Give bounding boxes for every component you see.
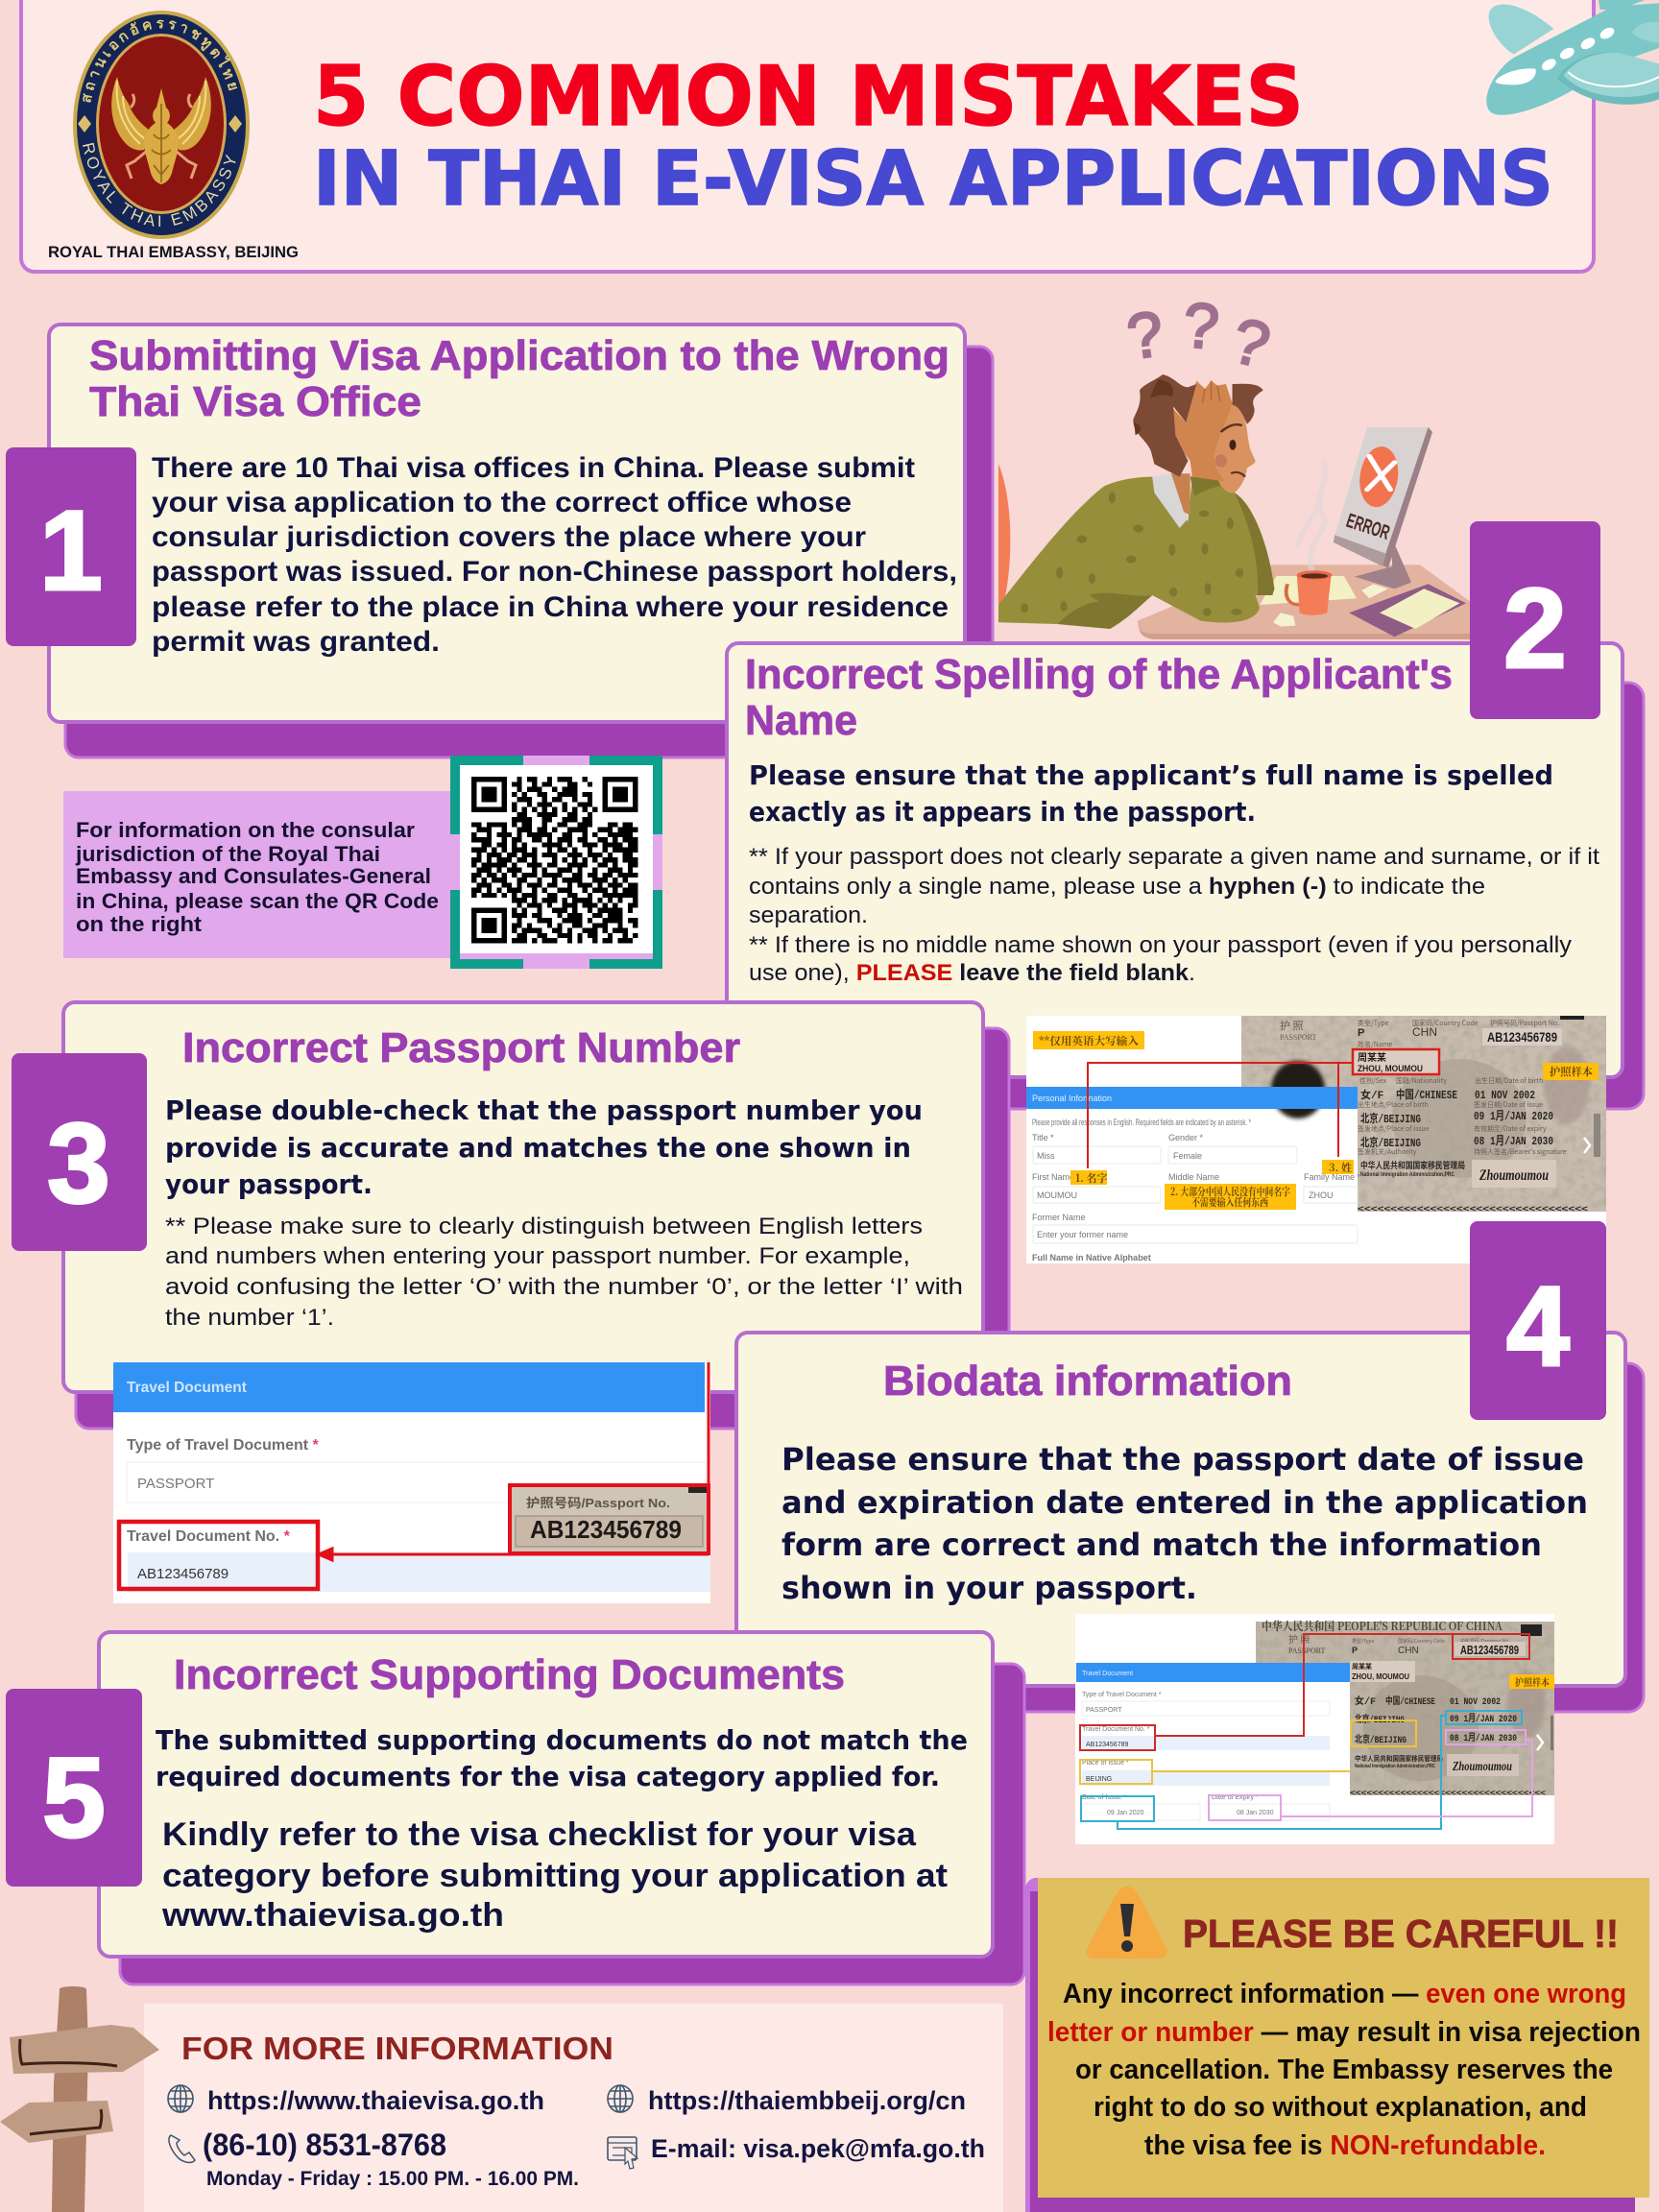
form text and fields: ZHOU	[1309, 1190, 1333, 1200]
passport text: 08 1月/JAN 2030	[1450, 1732, 1517, 1744]
heading 1: Submitting Visa Application to the Wrong	[89, 332, 950, 379]
form text and fields: Date of Issue *	[1082, 1794, 1126, 1801]
note text	[75, 818, 439, 936]
icon: garuda	[111, 77, 211, 184]
number badge 3: 3	[47, 1100, 110, 1227]
header banner	[19, 0, 1596, 274]
number badge 1	[6, 447, 136, 646]
body text 1: permit was granted.	[152, 626, 440, 658]
passport text: CHN	[1412, 1025, 1437, 1039]
heading 1: Thai Visa Office	[89, 378, 421, 425]
number badge 5	[6, 1689, 142, 1887]
passport text	[1280, 1018, 1600, 1214]
heading 2: Name	[745, 697, 857, 744]
checklist text: www.thaievisa.go.th	[161, 1897, 504, 1934]
passport text: 持照人签名/Bearer's signature	[1474, 1147, 1567, 1157]
icon: embassy seal: ROYAL THAI EMBASSY	[83, 142, 236, 227]
body text 2: exactly as it appears in the passport.	[749, 796, 1256, 828]
passport text: PASSPORT	[1288, 1647, 1325, 1655]
checklist text: category before submitting your application at	[162, 1858, 948, 1894]
passport text: PASSPORT	[1280, 1033, 1316, 1042]
illustration: confused person at computer with error: ERROR	[1343, 510, 1392, 544]
panel 2: incorrect spelling of name	[727, 643, 1644, 1109]
title	[313, 49, 1553, 223]
heading 2: Incorrect Spelling of the Applicant's	[745, 651, 1453, 698]
notes 2: use one), PLEASE leave the field blank .	[749, 960, 1195, 986]
caption: embassy name: ROYAL THAI EMBASSY, BEIJING	[48, 243, 299, 261]
warning body: right to do so without explanation, and	[1094, 2092, 1587, 2123]
passport text: National Immigration Administration,PRC	[1360, 1172, 1455, 1178]
form text and fields: Middle Name	[1168, 1172, 1219, 1182]
passport text: 护 照	[1280, 1018, 1303, 1033]
passport text: 国籍/Nationality	[1396, 1076, 1447, 1086]
yellow callouts: 3. 姓	[1329, 1160, 1352, 1175]
heading 3: Incorrect Passport Number	[182, 1024, 740, 1071]
phone number	[169, 2128, 579, 2190]
passport text	[1262, 1618, 1553, 1797]
passport text: 类型/Type	[1358, 1019, 1389, 1028]
passport text: AB123456789	[1487, 1029, 1557, 1045]
checklist text: Kindly refer to the visa checklist for your visa	[162, 1816, 917, 1853]
notes 3: and numbers when entering your passport number. For example,	[165, 1243, 910, 1269]
passport text: 09 1月/JAN 2020	[1450, 1713, 1517, 1725]
form text and fields: Please provide all responses in English. Required fields are indicated by an asterisk. *	[1032, 1118, 1251, 1127]
passport text: 国家码/Country Code	[1412, 1019, 1479, 1028]
passport number crop: AB123456789	[530, 1515, 682, 1544]
panel 3: incorrect passport number	[63, 1002, 1009, 1429]
heading 4: Biodata information	[883, 1358, 1292, 1405]
form text and fields: AB123456789	[1086, 1742, 1128, 1748]
body text 5: required documents for the visa category applied for.	[156, 1761, 940, 1792]
colored connector lines and boxes	[1080, 1634, 1532, 1829]
form text and fields: MOUMOU	[1037, 1190, 1077, 1200]
illustration: confused person at computer with error	[998, 289, 1470, 639]
form text and fields: 08 Jan 2030	[1237, 1810, 1274, 1816]
passport text: 护照号码/Passport No.	[1460, 1638, 1510, 1645]
notes 3: the number ‘1’.	[165, 1305, 334, 1331]
title: 5 COMMON MISTAKES	[313, 49, 1304, 145]
body text 5	[156, 1724, 968, 1792]
icon: wooden signpost	[0, 1986, 159, 2212]
panel: for more information	[144, 2004, 1003, 2212]
passport text: <<<<<<<<<<<<<<<<<<<<<<<<<<<<<<<<<<<	[1358, 1204, 1588, 1214]
icon: question marks	[1123, 289, 1277, 381]
passport text: P	[1352, 1646, 1358, 1655]
notes 2: ** If there is no middle name shown on your passport (even if you personally	[749, 932, 1572, 958]
title: IN THAI E-VISA APPLICATIONS	[313, 136, 1553, 223]
note text: on the right	[76, 912, 203, 936]
passport text: 北京/BEIJING	[1360, 1111, 1421, 1126]
passport text: 北京/BEIJING	[1355, 1733, 1407, 1746]
passport text: AB123456789	[1460, 1643, 1519, 1657]
checklist text	[161, 1816, 948, 1934]
passport text: 姓名/Name	[1358, 1040, 1392, 1049]
passport text: 北京/BEIJING	[1355, 1713, 1405, 1726]
passport text: 签发日期/Date of issue	[1474, 1100, 1543, 1110]
passport text: National Immigration Administration,PRC	[1355, 1764, 1435, 1769]
image: travel document form with passport number: PASSPORT	[137, 1476, 214, 1492]
phone number: Monday - Friday : 15.00 PM. - 16.00 PM.	[206, 2168, 579, 2190]
notes 2: separation.	[749, 902, 868, 928]
passport number crop	[510, 1483, 709, 1553]
yellow label: 护照样本	[1515, 1674, 1550, 1689]
passport text: Zhoumoumou	[1452, 1760, 1512, 1774]
note text: jurisdiction of the Royal Thai	[75, 842, 380, 866]
warning body: the visa fee is NON-refundable.	[1144, 2130, 1546, 2161]
notes 2: ** If your passport does not clearly separate a given name and surname, or if it	[749, 844, 1599, 870]
passport text: 类型/Type	[1352, 1638, 1374, 1645]
passport text: 性别/Sex	[1359, 1076, 1387, 1086]
passport text: 中华人民共和国国家移民管理局	[1355, 1754, 1443, 1763]
number badge 2: 2	[1503, 565, 1567, 692]
notes 3: avoid confusing the letter ‘O’ with the number ‘0’, or the letter ‘I’ with	[165, 1274, 963, 1300]
form text and fields	[1026, 1087, 1361, 1262]
passport text: 周某某	[1358, 1051, 1386, 1064]
form text and fields: First Name *	[1032, 1172, 1081, 1182]
passport text: 中华人民共和国国家移民管理局	[1360, 1160, 1465, 1170]
form text and fields: Former Name	[1032, 1213, 1086, 1222]
notes 3	[165, 1214, 963, 1331]
warning body: or cancellation. The Embassy reserves the	[1075, 2055, 1613, 2085]
passport text: 中华人民共和国 PEOPLE'S REPUBLIC OF CHINA	[1262, 1618, 1503, 1634]
QR code	[450, 756, 662, 969]
image: travel document form with passport number: AB123456789	[137, 1566, 228, 1582]
passport text: ZHOU, MOUMOU	[1358, 1064, 1423, 1074]
image: travel document form with passport number: Travel Document	[127, 1380, 247, 1396]
phone number: (86-10) 8531-8768	[203, 2128, 446, 2162]
passport text: 北京/BEIJING	[1360, 1135, 1421, 1150]
number badge 4	[1470, 1221, 1606, 1420]
passport text: 女/F	[1360, 1088, 1383, 1102]
form text and fields: Travel Document No. *	[1082, 1726, 1150, 1733]
passport text: Zhoumoumou	[1479, 1167, 1549, 1184]
body text 3	[165, 1094, 923, 1200]
passport text: 01 NOV 2002	[1450, 1697, 1501, 1708]
form text and fields: Date of Expiry *	[1212, 1794, 1259, 1801]
panel 5: incorrect supporting documents	[99, 1632, 1024, 1984]
passport text: 中国/CHINESE	[1385, 1695, 1435, 1708]
notes 2	[749, 844, 1599, 986]
passport text: 签发地点/Place of issue	[1358, 1124, 1430, 1134]
passport text: 08 1月/JAN 2030	[1474, 1134, 1553, 1148]
heading 5: Incorrect Supporting Documents	[174, 1651, 845, 1698]
body text 1: please refer to the place in China where your residence	[152, 591, 949, 623]
warning body: Any incorrect information — even one wrong	[1063, 1979, 1626, 2009]
body text 1	[152, 452, 957, 658]
yellow callouts: 1. 名字	[1075, 1170, 1108, 1186]
form text and fields: PASSPORT	[1086, 1707, 1122, 1714]
form text and fields: Personal Information	[1032, 1094, 1112, 1103]
body text 2: Please ensure that the applicant’s full name is spelled	[749, 759, 1553, 791]
note text: For information on the consular	[76, 818, 415, 842]
head: face, hand and hair	[1213, 400, 1256, 493]
notes 3: ** Please make sure to clearly distinguish between English letters	[165, 1214, 923, 1239]
image: travel document form with passport number: Travel Document No. *	[127, 1528, 291, 1545]
panel 1: wrong visa office	[49, 325, 993, 757]
panel 4: biodata information	[736, 1333, 1644, 1712]
passport text: 女/F	[1355, 1695, 1376, 1708]
red arrow	[319, 1362, 709, 1560]
passport text: ZHOU, MOUMOU	[1352, 1672, 1409, 1681]
icon: question marks: ?	[1123, 297, 1167, 373]
number badge 5: 5	[42, 1735, 106, 1862]
body text 1: There are 10 Thai visa offices in China. Please submit	[152, 452, 915, 484]
passport text: <<<<<<<<<<<<<<<<<<<<<<<<<<<<<<<<<<<	[1350, 1789, 1546, 1797]
heading 1	[89, 332, 950, 425]
form text and fields: Full Name in Native Alphabet	[1032, 1253, 1151, 1262]
number badge 1: 1	[39, 488, 103, 614]
notes 2: contains only a single name, please use a hyphen (-) to indicate the	[749, 874, 1485, 900]
form text and fields: Family Name *	[1304, 1172, 1361, 1182]
warning panel: please be careful	[1025, 1878, 1649, 2212]
warning body	[1047, 1979, 1641, 2161]
body text 4: and expiration date entered in the application	[781, 1484, 1588, 1521]
icon: airplane	[1486, 0, 1659, 115]
form text and fields: 09 Jan 2020	[1107, 1810, 1144, 1816]
yellow callouts	[1033, 1031, 1599, 1210]
icon: embassy seal	[73, 11, 250, 239]
form text and fields: Enter your former name	[1037, 1230, 1128, 1239]
heading 2	[745, 651, 1453, 744]
body text 3: Please double-check that the passport number you	[165, 1094, 923, 1126]
yellow callouts: 不需要输入任何东西	[1191, 1194, 1268, 1210]
image: travel document form with passport number	[113, 1362, 710, 1603]
image: biodata form with passport	[1075, 1614, 1554, 1844]
body text 4: form are correct and match the information	[781, 1527, 1542, 1563]
passport number crop: 护照号码/Passport No.	[526, 1496, 670, 1510]
passport text: 01 NOV 2002	[1475, 1089, 1535, 1102]
form text and fields: Gender *	[1168, 1133, 1204, 1142]
yellow callouts: 2. 大部分中国人民没有中间名字	[1170, 1184, 1290, 1199]
body text 2	[749, 759, 1553, 828]
passport text: 签发机关/Authority	[1358, 1147, 1417, 1157]
email: E-mail: visa.pek@mfa.go.th	[651, 2134, 985, 2163]
body text 3: provide is accurate and matches the one shown in	[165, 1132, 911, 1164]
form text and fields: Title *	[1032, 1133, 1054, 1142]
passport text: 周某某	[1352, 1662, 1372, 1671]
body text 1: your visa application to the correct office whose	[152, 487, 852, 518]
warning heading: PLEASE BE CAREFUL !!	[1183, 1911, 1619, 1956]
body text 4	[781, 1441, 1588, 1606]
image: travel document form with passport number: Type of Travel Document *	[127, 1437, 320, 1454]
passport text: 护照号码/Passport No.	[1490, 1019, 1559, 1028]
form text and fields: Type of Travel Document *	[1082, 1692, 1162, 1698]
form text and fields: BEIJING	[1086, 1776, 1112, 1783]
passport text: 出生地点/Place of birth	[1358, 1100, 1429, 1110]
passport text: 09 1月/JAN 2020	[1474, 1109, 1553, 1123]
body text 3: your passport.	[165, 1168, 373, 1200]
passport text: 国家码/Country Code	[1398, 1638, 1445, 1645]
form text and fields: Travel Document	[1082, 1671, 1133, 1677]
number badge 3	[12, 1053, 147, 1251]
passport text: 有效期至/Date of expiry	[1474, 1124, 1547, 1134]
red connector lines	[1088, 1063, 1353, 1168]
icon: question marks: ?	[1225, 303, 1277, 381]
body text 4: shown in your passport.	[781, 1570, 1197, 1606]
passport text: 护 照	[1288, 1631, 1310, 1646]
number badge 2	[1470, 521, 1600, 719]
body text 1: passport was issued. For non-Chinese passport holders,	[152, 556, 957, 588]
note text: Embassy and Consulates-General	[76, 864, 431, 888]
body text 5: The submitted supporting documents do not match the	[156, 1724, 968, 1756]
form text and fields: Female	[1173, 1151, 1202, 1161]
heading: more information: FOR MORE INFORMATION	[181, 2031, 613, 2066]
yellow callouts: **仅用英语大写输入	[1039, 1033, 1139, 1048]
passport text: 出生日期/Date of birth	[1475, 1076, 1543, 1086]
form text and fields	[1076, 1663, 1350, 1820]
link: embassy website: https://thaiembbeij.org/cn	[648, 2086, 966, 2115]
passport text: 中国/CHINESE	[1396, 1087, 1457, 1102]
yellow callouts: 护照样本	[1550, 1064, 1593, 1079]
link: visa website: https://www.thaievisa.go.th	[207, 2086, 544, 2115]
warning body: letter or number — may result in visa rejection	[1047, 2017, 1641, 2048]
icon: warning triangle	[1087, 1887, 1167, 1959]
form text and fields: Place of Issue *	[1082, 1760, 1129, 1767]
icon: question marks: ?	[1180, 289, 1222, 363]
passport text: P	[1358, 1027, 1364, 1039]
form text and fields: Miss	[1037, 1151, 1055, 1161]
image: passport name sample with form	[1026, 1016, 1606, 1263]
body text 4: Please ensure that the passport date of issue	[781, 1441, 1584, 1478]
icon: embassy seal: สถานเอกอัครราชทูตไทย	[83, 19, 238, 103]
number badge 4: 4	[1506, 1263, 1570, 1390]
body text 1: consular jurisdiction covers the place where your	[152, 521, 866, 553]
panel: consular jurisdiction note and QR code	[63, 756, 662, 969]
passport text: CHN	[1398, 1646, 1419, 1656]
note text: in China, please scan the QR Code	[76, 889, 439, 913]
